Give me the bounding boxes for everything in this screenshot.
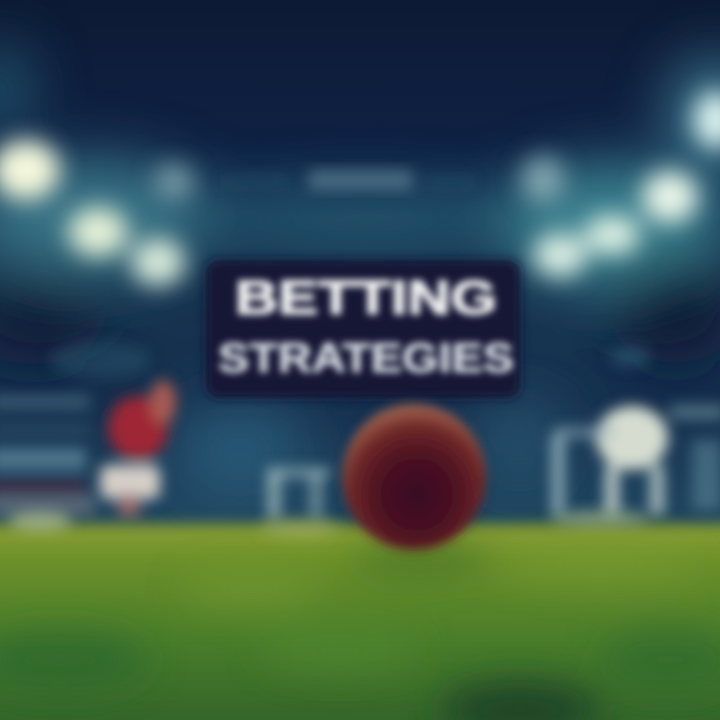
football bbox=[342, 404, 486, 550]
sign panel bbox=[206, 260, 520, 398]
distant goal post behind ball bbox=[268, 468, 330, 520]
right floodlights bbox=[521, 92, 720, 277]
sign: betting strategies bbox=[206, 260, 520, 398]
distant top banner glow bbox=[220, 170, 475, 190]
pale field edge bbox=[8, 510, 650, 537]
player in red bbox=[100, 380, 176, 517]
left stands bbox=[0, 342, 150, 516]
grass mottling bbox=[0, 546, 720, 720]
left floodlights bbox=[0, 140, 194, 286]
sign text: STRATEGIES bbox=[218, 334, 514, 381]
grass field bbox=[0, 510, 720, 720]
stadium light haze bbox=[0, 45, 720, 500]
sign text bbox=[218, 272, 514, 381]
sign text: BETTING bbox=[235, 272, 497, 325]
goal post and players on right bbox=[552, 347, 720, 515]
